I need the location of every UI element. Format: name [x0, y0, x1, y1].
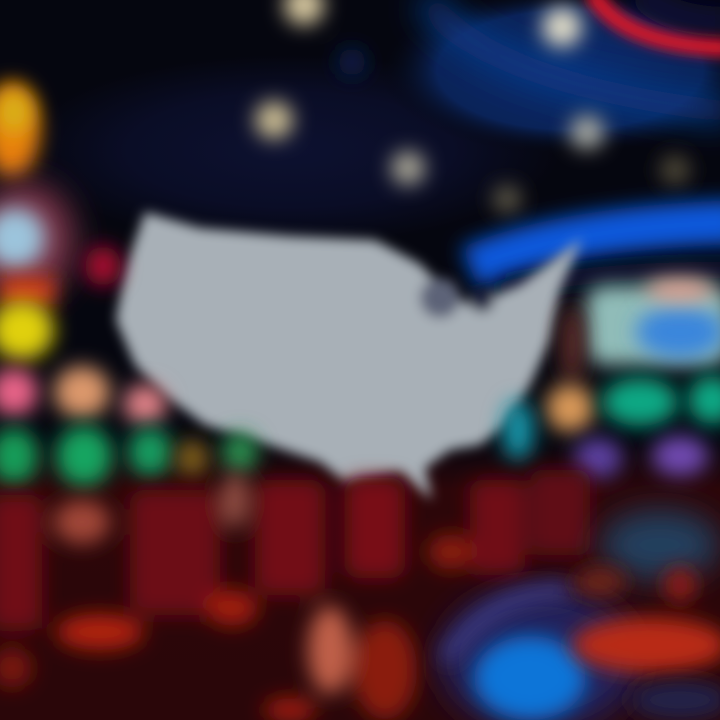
decoration: bottom right blue circle and red band — [440, 510, 720, 720]
stars — [255, 0, 690, 213]
right panel: coloured lights — [502, 278, 720, 478]
map: United States silhouette — [116, 212, 582, 500]
decoration: blue light band — [470, 222, 720, 290]
decoration: top right blue arcs and red ring — [425, 0, 720, 112]
theatre seats: dark red rows — [0, 470, 590, 720]
left column: colourful lights — [0, 82, 258, 486]
